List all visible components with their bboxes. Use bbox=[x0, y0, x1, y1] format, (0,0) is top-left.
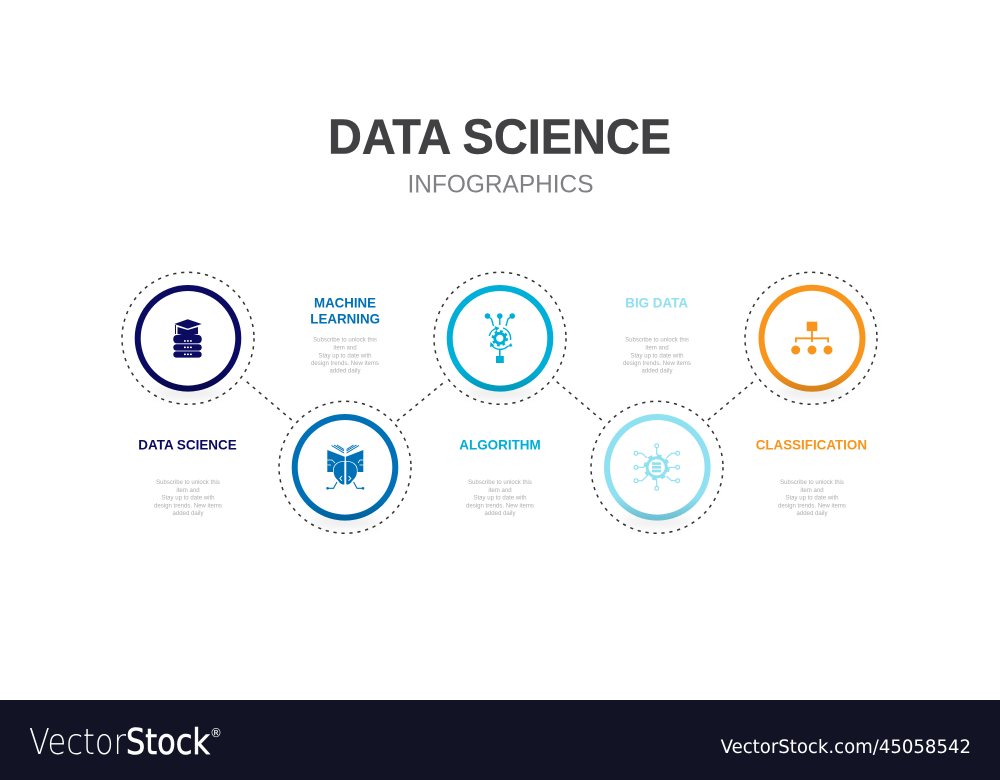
text block: algorithm: Subscribe to unlock this bbox=[468, 480, 532, 486]
text block: data science bbox=[154, 480, 222, 517]
icon: book with brain bbox=[326, 445, 364, 490]
text block: classification: design trends. New items bbox=[778, 503, 846, 509]
text block: data science: item and bbox=[176, 488, 200, 494]
text block: classification: item and bbox=[800, 488, 824, 494]
footer logo: ® bbox=[210, 726, 222, 740]
heading: algorithm: ALGORITHM bbox=[459, 436, 541, 452]
connector: big data to classification bbox=[708, 382, 753, 420]
text block: classification: Subscribe to unlock this bbox=[780, 480, 844, 486]
connector: algorithm to big data bbox=[557, 382, 602, 420]
footer logo: Vector bbox=[29, 722, 126, 763]
text block: big data: design trends. New items bbox=[623, 361, 691, 367]
footer logo: Stock bbox=[126, 722, 210, 763]
text block: data science: Stay up to date with bbox=[161, 496, 215, 502]
step 2 circle: machine learning bbox=[279, 401, 411, 533]
text block: big data bbox=[623, 338, 691, 375]
heading: machine learning: LEARNING bbox=[310, 310, 380, 326]
heading: big data: BIG DATA bbox=[625, 294, 688, 310]
step 4 circle: big data bbox=[591, 401, 723, 533]
text block: data science: design trends. New items bbox=[154, 503, 222, 509]
text block: algorithm: design trends. New items bbox=[466, 503, 534, 509]
connector: machine learning to algorithm bbox=[397, 382, 445, 421]
subtitle: INFOGRAPHICS bbox=[408, 171, 594, 199]
text block: algorithm: added daily bbox=[485, 511, 516, 517]
text block: machine learning: item and bbox=[333, 346, 357, 352]
title: DATA SCIENCE bbox=[328, 110, 671, 164]
text block: algorithm: item and bbox=[488, 488, 512, 494]
text block: classification: added daily bbox=[797, 511, 828, 517]
text block: classification: Stay up to date with bbox=[785, 496, 839, 502]
text block: machine learning: design trends. New items bbox=[311, 361, 379, 367]
heading: machine learning bbox=[310, 294, 380, 326]
text block: data science: Subscribe to unlock this bbox=[156, 480, 220, 486]
icon: hierarchy chart bbox=[791, 322, 832, 354]
heading: machine learning: MACHINE bbox=[314, 294, 376, 310]
text block: machine learning bbox=[311, 338, 379, 375]
text block: machine learning: Subscribe to unlock this bbox=[313, 338, 377, 344]
text block: machine learning: Stay up to date with bbox=[318, 353, 372, 359]
text block: machine learning: added daily bbox=[330, 369, 361, 375]
heading: data science: DATA SCIENCE bbox=[138, 436, 237, 452]
connector: data science to machine learning bbox=[247, 382, 292, 420]
step 5 circle: classification bbox=[745, 272, 877, 404]
text block: big data: item and bbox=[645, 346, 669, 352]
icon: gear with inputs and output bbox=[485, 313, 515, 363]
footer image id: VectorStock.com/45058542 bbox=[721, 736, 971, 758]
heading: classification: CLASSIFICATION bbox=[756, 436, 867, 452]
text block: big data: added daily bbox=[642, 369, 673, 375]
text block: data science: added daily bbox=[173, 511, 204, 517]
text block: big data: Stay up to date with bbox=[630, 353, 684, 359]
footer bar bbox=[0, 700, 1000, 780]
step 3 circle: algorithm bbox=[434, 272, 566, 404]
icon: gear with server and circuit nodes bbox=[634, 444, 680, 490]
step 1 circle: data science bbox=[122, 272, 254, 404]
footer logo bbox=[29, 722, 222, 763]
text block: classification bbox=[778, 480, 846, 517]
text block: big data: Subscribe to unlock this bbox=[625, 338, 689, 344]
icon: database with graduation cap bbox=[173, 319, 202, 358]
text block: algorithm: Stay up to date with bbox=[473, 496, 527, 502]
text block: algorithm bbox=[466, 480, 534, 517]
